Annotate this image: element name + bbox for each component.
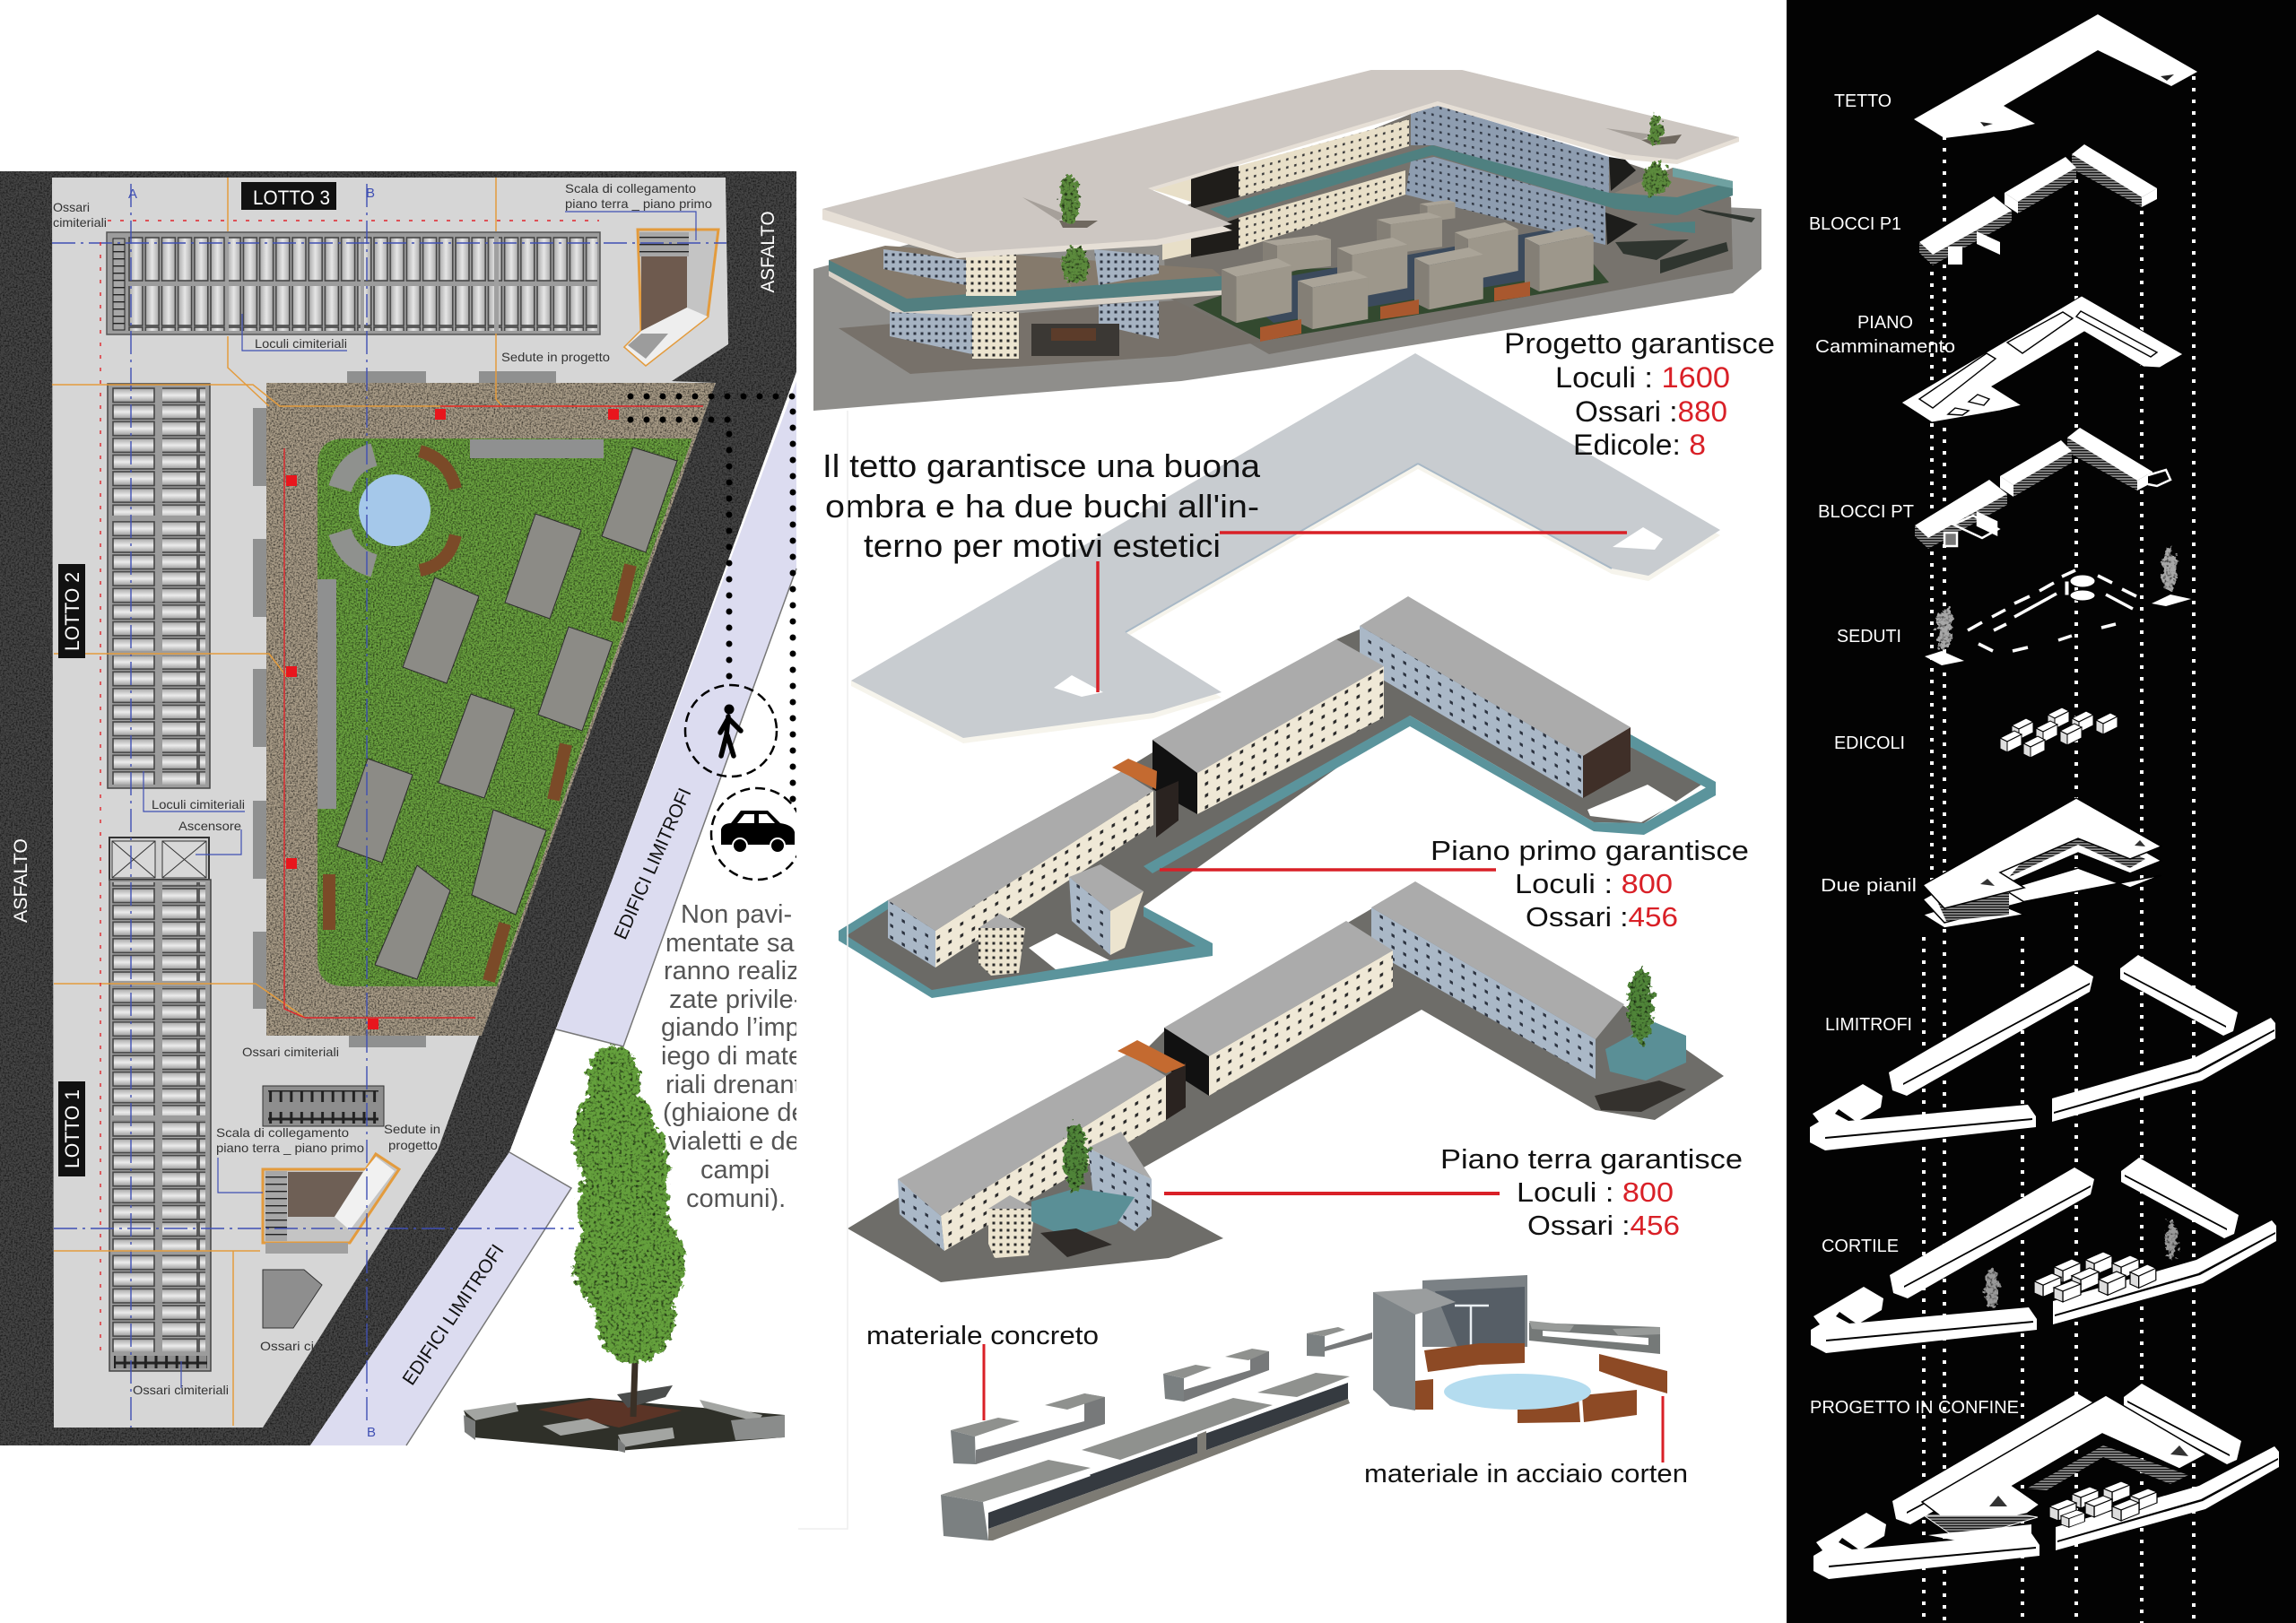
text: non pavimentate: vialetti e de xyxy=(668,1127,800,1156)
leader line: piano terra xyxy=(1164,1192,1500,1195)
water pond xyxy=(1444,1374,1591,1410)
plan annotations: Loculi cimiteriali xyxy=(152,797,245,812)
roof hole left xyxy=(1054,675,1103,697)
hex block xyxy=(978,914,1025,976)
columns under the roof xyxy=(883,249,1159,359)
plan annotations: Ossari ci xyxy=(260,1339,314,1353)
floor slab xyxy=(839,628,1704,995)
label: lotto 3 xyxy=(241,182,336,210)
confine edicole xyxy=(2049,1481,2157,1527)
layer: blocchi pt xyxy=(1915,428,2170,549)
black dotted paths xyxy=(631,396,793,807)
confine hatch xyxy=(2027,1445,2188,1490)
text: materiale corten: materiale in acciaio corten xyxy=(1364,1460,1688,1488)
leader line: concrete xyxy=(983,1344,985,1420)
void near the right end xyxy=(1587,785,1677,822)
label: lotto 2: LOTTO 2 xyxy=(61,572,83,651)
concrete C bench four xyxy=(1529,1321,1660,1354)
inner outlines xyxy=(1919,311,2157,415)
diagram: materials xyxy=(941,1275,1667,1541)
plan annotations: cimiteriali xyxy=(53,215,107,230)
text: progetto garantisce xyxy=(1504,327,1775,461)
section letters: B xyxy=(366,186,375,201)
courtyard floor behind walls xyxy=(1162,114,1733,354)
back walls xyxy=(1148,105,1638,260)
small blocks p1 xyxy=(1948,231,2000,265)
small block xyxy=(1088,1132,1152,1231)
text: non pavimentate: iego di mate xyxy=(661,1042,803,1071)
block left xyxy=(898,1040,1186,1251)
block right xyxy=(1360,596,1631,798)
plan annotations: Ossari cimiteriali xyxy=(242,1045,339,1059)
panel background xyxy=(1787,0,2296,1623)
trees in the roof holes xyxy=(1059,115,1669,285)
floor slab xyxy=(848,883,1724,1282)
foliage xyxy=(573,1045,685,1363)
stair detail pt left xyxy=(1944,513,1998,546)
outlines of neighbouring edges xyxy=(406,568,796,1445)
panel: exploded axonometric xyxy=(1787,0,2296,1623)
text: piano primo garantisce: Ossari :456 xyxy=(1526,901,1678,933)
concrete bench long xyxy=(941,1373,1350,1541)
layer labels: BLOCCI PT xyxy=(1818,502,1914,522)
stone arcs beside the pond xyxy=(340,455,374,566)
text: piano primo garantisce: Loculi : 800 xyxy=(1515,868,1673,899)
text: piano terra garantisce: Loculi : 800 xyxy=(1517,1176,1674,1208)
bench dashes xyxy=(1968,570,2136,651)
planter xyxy=(464,1385,785,1453)
text: il tetto garantisce: terno per motivi estetici xyxy=(864,527,1221,564)
layer labels: EDICOLI xyxy=(1834,733,1905,753)
plan annotations: piano terra _ piano primo xyxy=(565,196,712,211)
section letters xyxy=(128,186,376,1440)
text: non pavimentate: ranno realiz xyxy=(664,957,800,985)
plan annotations: Scala di collegamento xyxy=(565,181,696,195)
text: non pavimentate: riali drenant xyxy=(665,1071,802,1099)
leader line: corten xyxy=(1661,1396,1665,1462)
seating right xyxy=(1595,1081,1686,1112)
label: edifici limitrofi upper: EDIFICI LIMITROFI xyxy=(611,785,696,942)
roof edge xyxy=(822,70,1739,258)
lower terrace xyxy=(839,300,1262,374)
corten seats xyxy=(1415,1343,1667,1423)
layer: tetto xyxy=(1914,14,2197,138)
panel: top rendering xyxy=(813,70,1761,411)
layer: progetto in confine xyxy=(1813,1384,2279,1579)
corten benches xyxy=(1260,282,1530,342)
block middle xyxy=(1164,921,1393,1096)
label: asfalto right: ASFALTO xyxy=(758,212,778,292)
confine tree tops xyxy=(1989,1445,2188,1506)
text: non pavimentate xyxy=(661,900,806,1213)
chapel and pond xyxy=(2065,575,2095,601)
confine floors xyxy=(1924,1515,2038,1541)
concrete C bench three xyxy=(1307,1327,1372,1357)
text: non pavimentate: (ghiaione de xyxy=(663,1098,806,1127)
layer: limitrofi xyxy=(1810,955,2275,1150)
layer: seduti xyxy=(1925,549,2191,665)
shadow between blocks xyxy=(1229,224,1594,323)
plan annotations xyxy=(53,181,712,1397)
block: ossari centre xyxy=(263,1086,384,1126)
plan annotations: Ossari xyxy=(53,200,90,214)
glass parapet xyxy=(839,716,1716,998)
concrete chapel xyxy=(1373,1275,1527,1410)
hex block xyxy=(988,1195,1035,1258)
label: lotto 1: LOTTO 1 xyxy=(61,1089,83,1168)
tree and planter xyxy=(464,1045,785,1453)
confine lower floor xyxy=(1928,1524,2031,1542)
asphalt road xyxy=(0,171,796,1445)
edifici limitrofi lower band xyxy=(310,1152,571,1445)
layer labels: BLOCCI P1 xyxy=(1809,214,1901,234)
label: lotto 3: LOTTO 3 xyxy=(253,187,330,209)
text: piano terra garantisce: Piano terra garantisce xyxy=(1440,1143,1743,1175)
text: piano terra garantisce: Ossari :456 xyxy=(1527,1210,1680,1241)
text: il tetto garantisce: ombra e ha due buchi all'in- xyxy=(825,488,1259,525)
block: lotto 2 loculi xyxy=(108,384,210,788)
courtyard lawn xyxy=(317,438,692,986)
plan annotations: Scala di collegamento xyxy=(216,1125,349,1140)
layer: piano camminamento xyxy=(1901,296,2183,422)
trees xyxy=(1063,968,1653,1191)
icon: pedestrian xyxy=(685,685,777,777)
text: progetto garantisce: Edicole: 8 xyxy=(1573,429,1706,461)
layer labels: LIMITROFI xyxy=(1825,1015,1912,1035)
icon: car xyxy=(710,787,796,881)
leader lines for the roof xyxy=(1098,533,1627,692)
layer labels: Camminamento xyxy=(1815,337,1955,357)
text: il tetto garantisce: Il tetto garantisce una buona xyxy=(822,447,1261,484)
label: edifici limitrofi lower: EDIFICI LIMITROFI xyxy=(399,1241,509,1389)
layer labels: PROGETTO IN CONFINE xyxy=(1810,1398,2019,1418)
corten curved benches xyxy=(420,451,456,570)
text: il tetto garantisce xyxy=(822,447,1261,564)
text: progetto garantisce: Ossari :880 xyxy=(1575,395,1727,428)
glass stairs right xyxy=(1605,1022,1686,1081)
faint sheet edge xyxy=(798,411,848,1529)
layer labels: Due pianil xyxy=(1821,876,1917,896)
pond xyxy=(359,474,430,546)
corten benches on the lawn xyxy=(329,565,631,981)
diagram: piano terra xyxy=(848,881,1724,1282)
ground xyxy=(813,197,1761,411)
diagram: roof xyxy=(851,353,1720,743)
confine roof xyxy=(1922,1395,2206,1528)
stair detail pt right xyxy=(2148,470,2170,486)
annotation leaders xyxy=(144,212,696,1388)
layer labels: SEDUTI xyxy=(1837,627,1901,647)
roof top xyxy=(822,70,1739,253)
text: non pavimentate: giando l’imp xyxy=(661,1013,800,1042)
site ground xyxy=(52,178,728,1428)
tree base right xyxy=(2152,595,2191,606)
text: non pavimentate: zate privile- xyxy=(669,985,802,1014)
block: lotto 3 loculi xyxy=(107,232,600,334)
section letters: B xyxy=(367,1425,376,1440)
block middle xyxy=(1152,639,1384,814)
text: materiale concreto: materiale concreto xyxy=(866,1322,1099,1350)
plan annotations: Ascensore xyxy=(178,819,241,833)
leader line: piano primo xyxy=(1160,868,1496,872)
text: progetto garantisce: Progetto garantisce xyxy=(1504,327,1775,360)
layer: blocchi p1 xyxy=(1919,144,2157,265)
edifici limitrofi upper band xyxy=(556,381,796,1046)
roof hole right xyxy=(1613,527,1663,550)
plan annotations: Ossari cimiteriali xyxy=(133,1383,229,1397)
text: non pavimentate: comuni). xyxy=(686,1185,786,1213)
concrete C bench two xyxy=(1163,1349,1269,1402)
block left xyxy=(888,759,1178,968)
layer labels: PIANO xyxy=(1857,313,1913,333)
stair top right xyxy=(625,230,718,365)
layer labels: CORTILE xyxy=(1822,1237,1899,1256)
edicole on the lawn xyxy=(337,447,677,979)
block: lotto 1 loculi xyxy=(109,880,211,1371)
void in slab xyxy=(1029,933,1109,970)
label: asfalto left: ASFALTO xyxy=(11,838,31,923)
cortile edicole xyxy=(2034,1252,2156,1302)
layer: cortile xyxy=(1811,1158,2276,1353)
text: piano primo garantisce: Piano primo garantisce xyxy=(1431,835,1749,866)
block: ossari corner xyxy=(263,1270,322,1328)
diagram: piano primo xyxy=(839,596,1716,998)
block: elevators xyxy=(109,838,209,880)
plan annotations: Loculi cimiteriali xyxy=(255,336,347,351)
dark seating on the right xyxy=(1615,209,1755,273)
small block xyxy=(1069,864,1144,955)
seating left xyxy=(1040,1228,1112,1257)
trunk xyxy=(626,1291,650,1417)
grey strips around the courtyard xyxy=(253,371,604,1047)
layer: due piani xyxy=(1923,798,2161,928)
text: piano primo garantisce xyxy=(1431,835,1749,933)
roof hole shadows xyxy=(1022,128,1652,221)
red dimension lines xyxy=(100,221,703,1354)
section letters: A xyxy=(128,187,137,202)
tree base left xyxy=(1925,651,1964,665)
plan annotations: progetto xyxy=(388,1138,438,1152)
roof surface xyxy=(851,353,1720,738)
service lines xyxy=(52,178,613,1426)
layer labels xyxy=(1809,91,2019,1418)
text: non pavimentate: mentate sa xyxy=(665,929,795,958)
courtyard gravel xyxy=(266,383,716,1036)
plan annotations: piano terra _ piano primo xyxy=(216,1141,364,1155)
block right xyxy=(1371,881,1624,1079)
courtyard grass xyxy=(1193,260,1609,341)
cortile trees xyxy=(1986,1220,2178,1307)
edicole blocks xyxy=(1222,200,1594,329)
trees xyxy=(1937,549,2177,651)
axis lines xyxy=(52,184,726,1428)
plan annotations: Sedute in xyxy=(384,1122,440,1136)
roof holes xyxy=(1059,135,1682,228)
glass stairs left xyxy=(1031,1188,1135,1237)
panel: site plan xyxy=(0,171,806,1445)
dotted guide lines xyxy=(1924,76,2194,1623)
text: non pavimentate: campi xyxy=(700,1156,770,1185)
concrete C bench one xyxy=(951,1393,1105,1464)
layer labels: TETTO xyxy=(1834,91,1892,111)
text: piano terra garantisce xyxy=(1440,1143,1743,1241)
stair bottom xyxy=(263,1154,399,1254)
roof edge xyxy=(851,360,1720,743)
red markers xyxy=(286,409,619,1029)
text: non pavimentate: Non pavi- xyxy=(681,900,792,929)
text: progetto garantisce: Loculi : 1600 xyxy=(1555,361,1730,394)
layer: edicoli xyxy=(2000,707,2118,758)
upper walkway xyxy=(829,145,1733,319)
inner edge shade xyxy=(1126,464,1612,632)
plan annotations: Sedute in progetto xyxy=(501,350,610,364)
